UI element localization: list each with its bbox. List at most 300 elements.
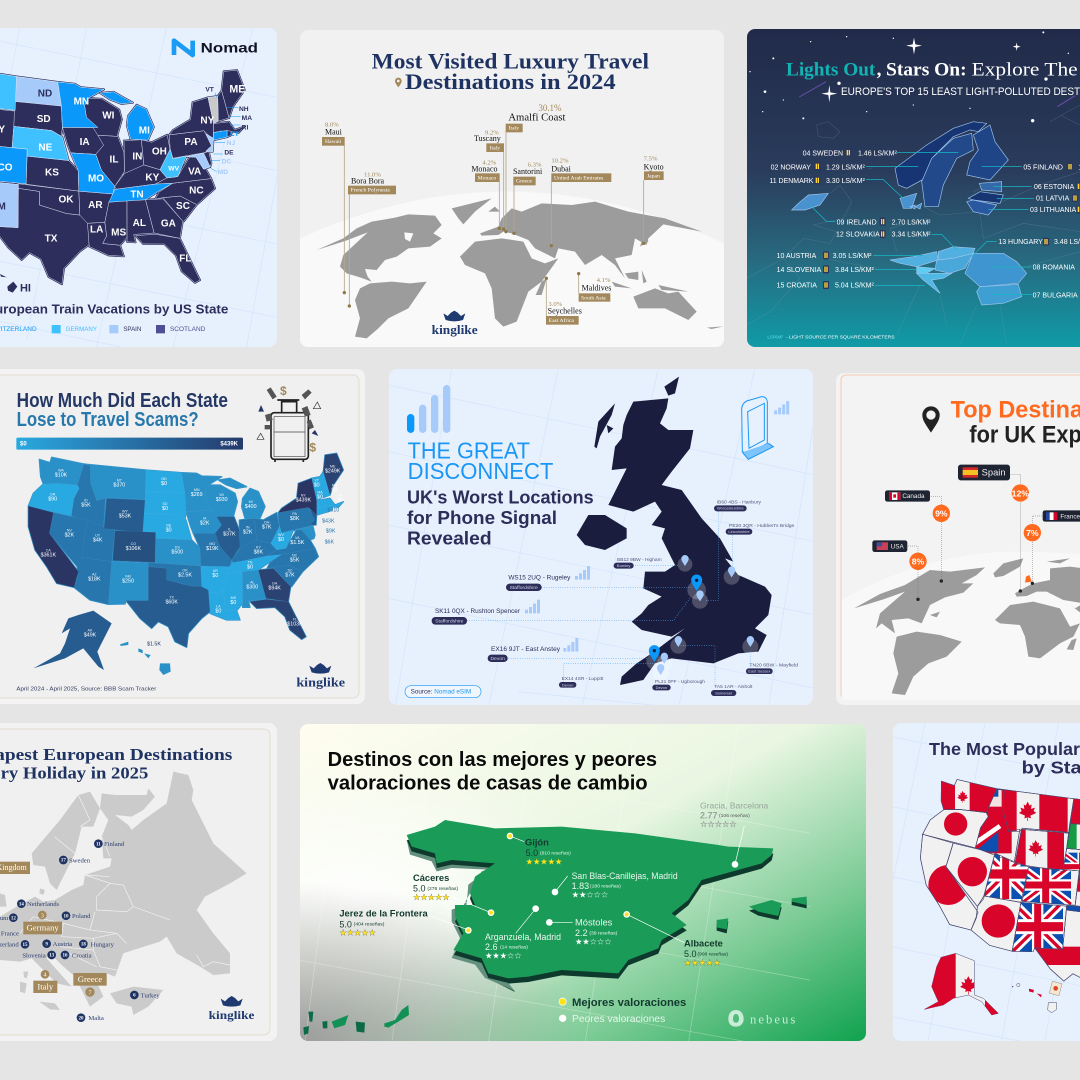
location labels: IB60 4BS - Hanbury (717, 500, 761, 506)
callout: USA: USA (891, 544, 904, 551)
label: Cáceres: Cáceres (413, 873, 449, 883)
state abbreviations: WI (219, 493, 224, 497)
globe backdrop (302, 344, 719, 347)
state abbreviations: ID (84, 499, 88, 503)
callout: Dubai: Dubai (551, 164, 572, 173)
country labels: 3.05 LS/KM² (833, 253, 872, 260)
state value labels: $0 (331, 487, 337, 493)
state abbreviations: CA (46, 549, 51, 553)
islands (303, 897, 807, 1035)
state value labels: $106K (126, 546, 141, 552)
destination markers: 13 (49, 954, 55, 959)
callout: France: France (1060, 513, 1080, 520)
state labels (0, 84, 245, 264)
location labels: Worcestershire (717, 506, 744, 511)
callout: Seychelles: Seychelles (548, 307, 582, 316)
gold tag: Germany: Germany (27, 923, 59, 933)
icons: lanterns (814, 149, 1080, 289)
logo: nebeus (728, 1010, 796, 1027)
subtitle: Revealed (407, 527, 492, 548)
Alaska flag state (922, 950, 1000, 1017)
label: Cáceres: 5.0 (413, 884, 425, 894)
state value labels: $439K (296, 497, 311, 503)
icon: location pin (922, 406, 940, 433)
label: Gracia, Barcelona: 2.77 (700, 811, 717, 821)
callout: Amalfi Coast: Italy (509, 126, 519, 132)
state labels: AR (88, 200, 103, 211)
state abbreviations: ND (161, 477, 167, 481)
label: Cáceres: ★★★★★ (413, 892, 450, 902)
callout: Maldives: South Asia (581, 295, 606, 301)
label: Albacete: ★★★★★ (684, 957, 721, 967)
globe backdrop (842, 552, 1080, 700)
map of Europe (0, 772, 247, 1015)
title: valoraciones de casas de cambio (328, 771, 648, 794)
state abbreviations: AK (88, 629, 93, 633)
country labels: 3.34 LS/KM² (892, 232, 931, 239)
destination markers: 15 (23, 943, 28, 948)
callout: Tuscany (474, 129, 504, 152)
label: Albacete: (908 reseñas) (697, 951, 728, 957)
state value labels: $49K (84, 633, 97, 639)
state value labels: $269 (191, 492, 203, 498)
northeast callout labels: RI (242, 124, 248, 131)
legend: SPAIN (123, 327, 141, 333)
title (0, 745, 233, 782)
icon: signal bars (407, 385, 450, 433)
label: Gijón: (810 reseñas) (540, 851, 571, 857)
state abbreviations: NC (292, 553, 298, 557)
location labels: East Sussex (748, 669, 770, 674)
state labels: NY (200, 116, 215, 127)
logo: kinglike (432, 311, 478, 337)
location labels: PL21 0PF - Ugborough (655, 679, 705, 685)
state value labels: $249K (325, 468, 341, 474)
subtitle (407, 486, 594, 548)
title: , (877, 59, 882, 80)
connectors (428, 826, 744, 943)
footnote (768, 335, 894, 340)
legend: Mejores valoraciones (572, 997, 686, 1009)
state value labels: $53K (119, 514, 132, 520)
northeast callout labels: CT (230, 131, 239, 138)
state abbreviations: VA (295, 536, 300, 540)
state value labels: $0 (314, 482, 320, 488)
state abbreviations: OR (50, 493, 56, 497)
state abbreviations: FL (293, 617, 297, 621)
label: Albacete: 5.0 (684, 949, 696, 959)
location labels (432, 500, 798, 696)
destination markers: Austria (53, 941, 72, 948)
state value labels: $0 (247, 564, 253, 570)
state abbreviations: PA (292, 512, 298, 516)
UK highlight (1025, 575, 1032, 583)
logo: kinglike: kinglike (209, 1008, 255, 1022)
country labels: 13 HUNGARY (998, 239, 1043, 246)
state abbreviations: SC (287, 569, 293, 573)
callout: Maldives (579, 277, 611, 302)
title: Destinations in 2024 (405, 69, 616, 94)
state value labels: $19K (206, 546, 219, 552)
callout: Bora Bora: French Polynesia (351, 188, 390, 194)
country labels: 11 DENMARK (769, 178, 814, 185)
state labels: OK (59, 195, 74, 206)
state abbreviations: TX (169, 596, 175, 600)
state value labels: $0 (212, 573, 218, 579)
state abbreviations: KS (175, 545, 180, 549)
state abbreviations: KY (256, 545, 261, 549)
state labels: OH (152, 146, 167, 157)
destination markers: 20 (79, 1016, 84, 1021)
state abbreviations: VT (314, 478, 320, 482)
label: Arganzuela (485, 932, 561, 961)
choropleth map of the US (28, 453, 343, 675)
destination markers: 14 (19, 902, 24, 907)
country labels: 10 AUSTRIA (777, 253, 817, 260)
callout: Kyoto: Japan (647, 173, 660, 179)
state labels: NC (189, 185, 204, 196)
state labels: WV (168, 166, 180, 173)
callout: Seychelles: East Africa (549, 317, 574, 324)
footnote: - LIGHT SOURCE PER SQUARE KILOMETERS (786, 334, 895, 339)
callout: Monaco: Monaco (478, 175, 496, 181)
callout: Bora Bora: 11.0% (364, 172, 381, 179)
state abbreviations: SD (162, 502, 168, 506)
state value labels: $2K (200, 520, 210, 526)
Hawaii: HI (20, 283, 31, 295)
label: Albacete (684, 939, 728, 967)
label: Jerez de la Frontera: 5.0 (339, 919, 352, 929)
state abbreviations: MA (317, 490, 323, 494)
gold tag: Italy (33, 970, 57, 993)
location labels: Devon (562, 682, 573, 687)
map of Spain: extrusion (407, 825, 773, 992)
state labels: SD (37, 114, 51, 125)
northeast callout labels: MD (218, 169, 228, 176)
state value labels: $310 (327, 508, 339, 514)
subtitle: UK's Worst Locations (407, 486, 594, 507)
logo: kinglike (209, 996, 255, 1022)
country labels: 1.46 LS/KM² (858, 151, 897, 158)
destination markers: 18 (81, 943, 86, 948)
state value labels: $300 (246, 585, 258, 591)
state value labels: $5K (81, 503, 91, 509)
label: Gijón: ★★★★★ (526, 856, 562, 866)
state value labels: $4K (93, 538, 103, 544)
destination markers: Finland (104, 841, 125, 848)
title: Lights Out (786, 59, 876, 80)
state abbreviations: UT (95, 534, 101, 538)
callout: Dubai (551, 157, 611, 182)
state value labels: $37K (223, 531, 236, 537)
state abbreviations: AL (250, 581, 255, 585)
destination markers: 10 (64, 914, 69, 919)
mini signal bars (525, 566, 590, 652)
destination markers: 17 (61, 859, 66, 864)
legend: Peores valoraciones (572, 1014, 665, 1025)
state abbreviations: NV (67, 529, 72, 533)
title: Destinos con las mejores y peores (328, 748, 657, 771)
state value labels: $400 (245, 504, 257, 510)
icon: suitcase with money: $ (280, 384, 287, 398)
state labels: MO (88, 173, 104, 184)
title: Most Visited Luxury Travel (372, 48, 649, 73)
country labels (769, 151, 1080, 299)
icon: phone (742, 397, 788, 459)
callout: Monaco (471, 160, 500, 182)
state labels: FL (179, 253, 191, 264)
title: DISCONNECT (408, 458, 553, 484)
state value labels: $94K (268, 585, 281, 591)
state value labels: $7K (285, 573, 295, 579)
callout: Maui: 8.0% (325, 122, 339, 129)
state labels: KS (45, 168, 59, 179)
callout: Canada: 9% (935, 509, 948, 519)
state value labels: $0 (278, 537, 284, 543)
state abbreviations: OK (182, 569, 188, 573)
callout: France: 7% (1026, 528, 1039, 538)
state labels: TN (130, 189, 144, 200)
state labels: IL (110, 154, 118, 165)
label: San Blas-Canillejas: ★★☆☆☆ (572, 889, 608, 899)
state labels: VA (188, 166, 201, 177)
flag map of the US (907, 770, 1080, 1013)
label: Jerez de la Frontera (339, 909, 428, 938)
country labels: 08 ROMANIA (1033, 265, 1075, 272)
destination markers: Poland (72, 913, 91, 920)
country labels: 5.04 LS/KM² (835, 283, 874, 290)
state value labels: $0 (338, 497, 344, 503)
destination markers: France (1, 930, 19, 937)
location labels: WS15 2UQ - Rugeley (508, 574, 571, 581)
state labels: MS (111, 228, 126, 239)
dotted connectors (467, 512, 750, 687)
state value labels: $500 (171, 549, 183, 555)
destination markers: 6 (133, 994, 136, 999)
logo: nebeus: nebeus (750, 1012, 796, 1026)
state labels: ND (38, 89, 52, 100)
California Japan disc (928, 865, 968, 905)
state value labels: $250 (122, 579, 134, 585)
state labels: WI (102, 111, 115, 122)
gold tag: United Kingdom (0, 862, 30, 874)
stars (749, 31, 1069, 122)
callout: Spain (958, 465, 1029, 593)
title: Lose to Travel Scams? (17, 409, 199, 431)
state value labels: $6K (325, 539, 335, 545)
logo: kinglike (296, 663, 345, 690)
callout: Tuscany: 9.2% (485, 129, 499, 136)
callout: Bora Bora (348, 172, 396, 194)
state abbreviations: TN (248, 561, 253, 565)
country borders (20, 795, 230, 970)
state abbreviations: NE (166, 524, 172, 528)
location labels: PE20 3QR - Hubbert's Bridge (729, 523, 795, 529)
gold tag: Germany: 3 (41, 913, 44, 919)
label: Móstoles (575, 918, 618, 946)
state value labels: $43K (322, 519, 335, 525)
state abbreviations: GA (272, 581, 278, 585)
callout: Kyoto (644, 156, 664, 180)
state value labels: $5K (290, 557, 300, 563)
label: San Blas-Canillejas (572, 871, 678, 899)
callout: Monaco: 4.2% (482, 160, 497, 167)
label: San Blas-Canillejas: (180 reseñas) (590, 884, 621, 890)
callout: Spain: Spain (982, 468, 1006, 478)
state labels: LA (90, 224, 103, 235)
state abbreviations: IA (203, 516, 207, 520)
state labels: IN (132, 151, 142, 162)
title: Stars On: (886, 59, 967, 80)
title (929, 739, 1080, 777)
panel: destinos casas de cambio (298, 723, 866, 1053)
subtitle: for Phone Signal (407, 507, 557, 528)
state value labels: $8K (290, 516, 300, 522)
country labels: 05 FINLAND (1023, 164, 1063, 171)
callout: Amalfi Coast: 30.1% (538, 103, 562, 113)
state abbreviations: AZ (92, 572, 97, 576)
source pill: Source: Nomad eSIM (411, 689, 471, 696)
point markers (465, 833, 738, 934)
northeast callout labels: NJ (227, 140, 235, 147)
icon: location pin (395, 78, 402, 87)
state abbreviations: RI (339, 493, 342, 497)
state labels: MI (139, 125, 150, 136)
location markers (646, 555, 758, 681)
title: How Much Did Each State (17, 390, 228, 412)
state labels: KY (145, 173, 160, 184)
state abbreviations: MI (249, 500, 253, 504)
location labels: Devon (656, 685, 667, 690)
callout: Tuscany: Italy (490, 145, 500, 151)
northeast callout labels: MA (242, 115, 252, 122)
state abbreviations: IL (228, 527, 231, 531)
gold tag: Italy: Italy (37, 982, 54, 992)
country labels: 03 LITHUANIA (1030, 207, 1077, 214)
location labels: Somerset (715, 691, 733, 696)
location labels: Devon (490, 656, 505, 662)
state value labels (41, 468, 344, 647)
title (328, 748, 657, 794)
destination markers: Malta (88, 1015, 104, 1022)
country labels: 2.70 LS/KM² (892, 219, 931, 226)
state labels: TX (45, 234, 58, 245)
title (786, 62, 1077, 80)
callout: France (1024, 510, 1080, 585)
state value labels: $2K (243, 530, 253, 536)
location labels: Burnley (617, 563, 630, 568)
state value labels: $9K (326, 529, 336, 535)
logo: kinglike: kinglike (432, 323, 478, 337)
logo: Nomad (174, 40, 258, 55)
state value labels: $0 (166, 528, 172, 534)
source pill (405, 686, 481, 698)
callout: Tuscany: Tuscany (474, 134, 501, 143)
state abbreviations: MO (209, 542, 215, 546)
state labels: GA (161, 218, 176, 229)
state value labels: $930 (216, 497, 228, 503)
destination markers: Sweden (69, 857, 91, 864)
world map (854, 558, 1080, 695)
callout: Canada: Canada (902, 493, 925, 500)
label: Gracia, Barcelona: ☆☆☆☆☆ (700, 819, 737, 829)
dotted connectors (908, 474, 1042, 599)
callout: Dubai: United Arab Emirates (554, 175, 603, 181)
label: Móstoles: (39 reseñas) (589, 931, 618, 937)
state labels: IA (80, 137, 90, 148)
country labels: 3.30 LS/KM² (826, 178, 865, 185)
state abbreviations: MN (194, 488, 200, 492)
state value labels: $1.5K (147, 641, 161, 647)
label: Móstoles: ★★☆☆☆ (575, 936, 612, 946)
callout: Maldives: 4.1% (597, 277, 611, 284)
state value labels: $361K (41, 553, 56, 559)
title: THE GREAT (408, 437, 530, 463)
leader lines (810, 152, 1034, 295)
state value labels: $18K (88, 576, 101, 582)
state value labels: $370 (113, 483, 125, 489)
country labels: 04 SWEDEN (803, 151, 843, 158)
location labels: Lincolnshire (728, 529, 750, 534)
callout: Monaco: Monaco (471, 164, 498, 173)
destination markers: Turkey (141, 992, 160, 999)
US map by favourite train destination (0, 69, 246, 286)
colour scale bar: $439K (220, 442, 239, 448)
location labels: SK11 0QX - Rushton Spencer (435, 608, 520, 615)
map: highlighted countries (792, 122, 1027, 305)
state value labels: $0 (230, 600, 236, 606)
label: Gijón: 5.0 (526, 848, 538, 858)
state abbreviations: WV (278, 533, 285, 537)
callout: Amalfi Coast: Amalfi Coast (508, 113, 565, 124)
state value labels: $10K (55, 473, 68, 479)
location labels: EX14 4SR - Luppitt (562, 676, 604, 682)
callout: Maui: Hawaii (325, 139, 342, 145)
title: The Most Popular (929, 739, 1080, 759)
map of the UK (577, 377, 772, 685)
country labels: 12 SLOVAKIA (836, 232, 880, 239)
legend (0, 325, 206, 333)
state value labels: $0 (215, 609, 221, 615)
icon: suitcase with money: $ (309, 441, 316, 455)
label: Jerez de la Frontera: (404 reseñas) (354, 922, 385, 928)
destination markers: 11 (96, 842, 101, 847)
state abbreviations: NY (301, 493, 306, 497)
country labels: 07 BULGARIA (1033, 292, 1078, 299)
callout: Kyoto: 7.5% (644, 156, 658, 163)
label: Cáceres (413, 873, 458, 902)
label: Móstoles: 2.2 (575, 928, 587, 938)
state labels: NE (38, 142, 53, 153)
destination markers: Netherlands (27, 901, 60, 908)
callout: Canada (885, 490, 950, 583)
state value labels: $60K (165, 600, 178, 606)
label: Gijón (525, 838, 571, 866)
label: San Blas-Canillejas: San Blas-Canillejas, Madrid (572, 871, 678, 881)
callout: Amalfi Coast (506, 103, 565, 132)
state abbreviations: IN (246, 526, 250, 530)
callout: Maui (322, 122, 345, 146)
state value labels: $1.5K (290, 540, 305, 546)
logo: kinglike: kinglike (296, 676, 345, 690)
title (372, 53, 649, 89)
callout: Santorini: 6.3% (528, 162, 542, 169)
destination markers: 16 (63, 954, 68, 959)
northeast callout labels: DE (224, 150, 234, 157)
gold tag: Germany (23, 911, 62, 934)
gold tag: Greece: Greece (78, 974, 102, 984)
title: Explore The (972, 59, 1078, 80)
